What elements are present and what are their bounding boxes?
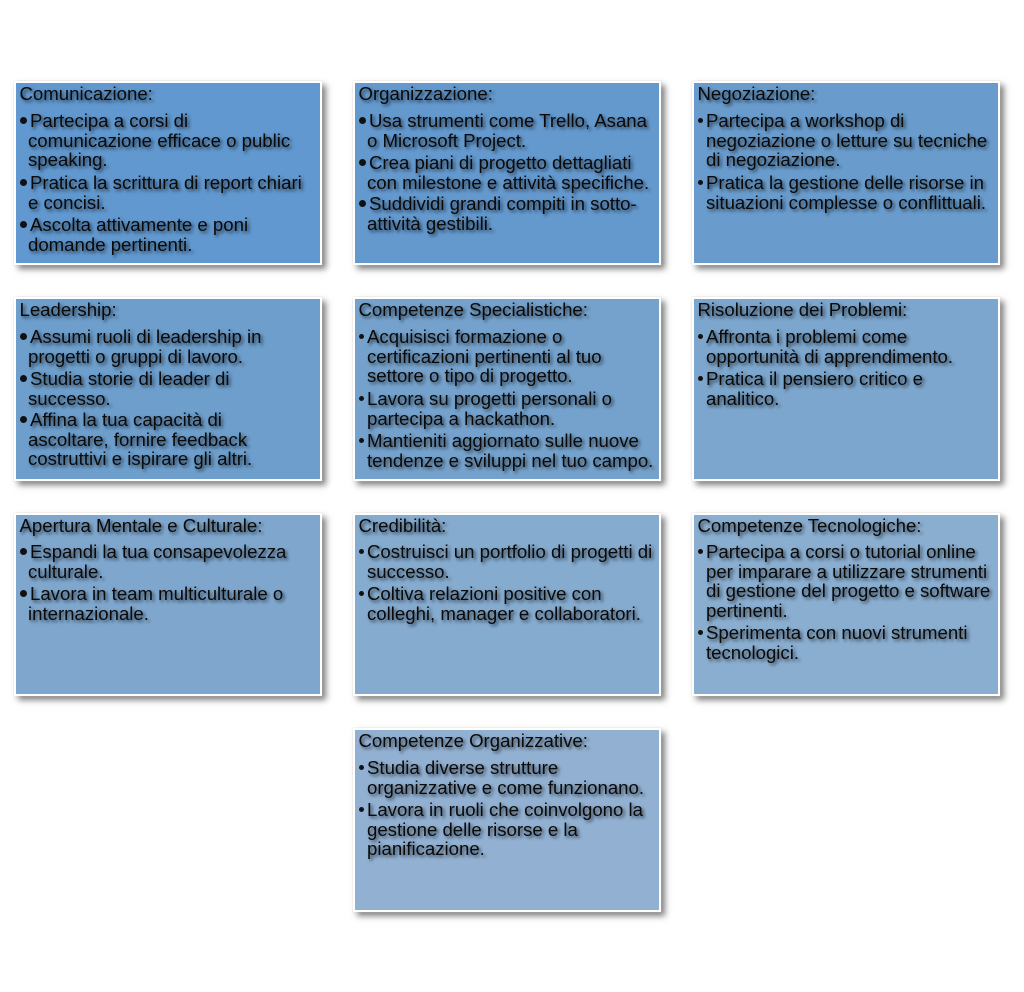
bullet: strutture: Studia diverse strutture <box>367 757 558 778</box>
bullet: opportunità: Affronta i problemi come <box>706 326 907 347</box>
bullet: storie <box>28 369 229 408</box>
bullet: consapevolezza: Espandi la tua consapevolezza <box>30 541 286 562</box>
bullet: ruoli risorse: gestione delle risorse e la <box>367 819 578 840</box>
bullet: strumenti: Usa strumenti come Trello, Asana <box>369 110 647 131</box>
bullet: scrittura <box>28 173 302 212</box>
panel: Competenze Organizzative <box>353 728 661 912</box>
heading: Comunicazione: Comunicazione: <box>20 83 153 104</box>
bullet: ruoli risorse <box>367 800 643 859</box>
bullet: risorse <box>706 173 986 212</box>
bullet: relazioni <box>367 584 641 623</box>
bullet: team <box>28 584 283 623</box>
bullet: workshop <box>706 111 987 170</box>
bullet: relazioni: colleghi, manager e collaboratori. <box>367 603 641 624</box>
bullet: formazione <box>367 327 602 386</box>
bullet: corsi online: per imparare a utilizzare strumenti <box>706 561 987 582</box>
panel: Credibilità <box>353 513 661 696</box>
bullet: corsi online: Partecipa a corsi o tutorial online <box>706 541 976 562</box>
bullet: opportunità: opportunità di apprendimento. <box>706 346 953 367</box>
bullet: risorse: situazioni complesse o conflittuali. <box>706 192 986 213</box>
bullet: sperimenta: Sperimenta con nuovi strumenti <box>706 622 967 643</box>
bullet: consapevolezza: culturale. <box>28 561 103 582</box>
bullet: ruoli risorse: pianificazione. <box>367 838 485 859</box>
bullet: sperimenta <box>706 623 967 662</box>
bullet: progetti personali: Lavora su progetti personali o <box>367 388 612 409</box>
heading: Negoziazione: Negoziazione: <box>698 83 815 104</box>
bullet: pensiero critico: Pratica il pensiero critico e <box>706 368 923 389</box>
bullet: ascoltare: ascoltare, fornire feedback <box>28 429 247 450</box>
bullet: corsi <box>28 111 290 170</box>
bullet: corsi: speaking. <box>28 149 108 170</box>
bullet: ruoli: Assumi ruoli di leadership in <box>30 326 262 347</box>
bullet: corsi online: pertinenti. <box>706 600 788 621</box>
panel: Competenze Tecnologiche <box>692 513 1000 696</box>
bullet: portfolio: successo. <box>367 561 450 582</box>
bullet: ascolto: Ascolta attivamente e poni <box>30 214 248 235</box>
bullet: aggiornato: tendenze e sviluppi nel tuo campo. <box>367 450 653 471</box>
bullet: strutture: organizzative e come funzionano. <box>367 777 644 798</box>
panel: Comunicazione <box>14 81 322 265</box>
bullet: piani <box>367 153 649 192</box>
panel: Negoziazione <box>692 81 1000 265</box>
panel: Organizzazione <box>353 81 661 265</box>
bullet: formazione: certificazioni pertinenti al tuo <box>367 346 602 367</box>
bullet: piani: Crea piani di progetto dettagliati <box>369 152 632 173</box>
bullet: formazione: settore o tipo di progetto. <box>367 365 573 386</box>
bullet: ruoli <box>28 327 262 366</box>
bullet: opportunità <box>706 327 953 366</box>
bullet: ruoli: progetti o gruppi di lavoro. <box>28 346 243 367</box>
bullet: workshop: Partecipa a workshop di <box>706 110 904 131</box>
bullet: pensiero critico: analitico. <box>706 388 779 409</box>
heading: Competenze Organizzative: Competenze Organizzative: <box>358 730 588 751</box>
bullet: ascoltare <box>28 410 252 469</box>
bullet: storie: successo. <box>28 388 111 409</box>
bullet: consapevolezza <box>28 542 286 581</box>
bullet: portfolio <box>367 542 652 581</box>
bullet: portfolio: Costruisci un portfolio di progetti di <box>367 541 652 562</box>
bullet: corsi online: di gestione del progetto e software <box>706 580 990 601</box>
heading: Credibilità: Credibilità: <box>358 515 446 536</box>
bullet: strumenti: o Microsoft Project. <box>367 130 526 151</box>
bullet: corsi online <box>706 542 990 620</box>
bullet: ascolto: domande pertinenti. <box>28 234 192 255</box>
bullet: strumenti <box>367 111 647 150</box>
bullet: progetti personali: partecipa a hackathon. <box>367 408 555 429</box>
bullet: ruoli risorse: Lavora in ruoli che coinvolgono la <box>367 799 643 820</box>
bullet: sperimenta: tecnologici. <box>706 642 799 663</box>
bullet: scrittura: e concisi. <box>28 192 106 213</box>
bullet: piani: con milestone e attività specifiche. <box>367 172 649 193</box>
bullet: strutture <box>367 758 644 797</box>
bullet: ascolto <box>28 215 248 254</box>
bullet: ascoltare: Affina la tua capacità di <box>30 409 222 430</box>
heading: Leadership: Leadership: <box>20 299 117 320</box>
panel: Leadership <box>14 297 322 481</box>
heading: Apertura Mentale e Culturale: Apertura Mentale e Culturale: <box>20 515 262 536</box>
heading: Organizzazione: Organizzazione: <box>358 83 493 104</box>
bullet: formazione: Acquisisci formazione o <box>367 326 562 347</box>
heading: Competenze Specialistiche: Competenze Specialistiche: <box>358 299 588 320</box>
bullet: pensiero critico <box>706 369 923 408</box>
bullet: compiti <box>367 194 637 233</box>
bullet: corsi: Partecipa a corsi di <box>30 110 188 131</box>
bullet: relazioni: Coltiva relazioni positive con <box>367 583 602 604</box>
heading: Competenze Tecnologiche: Competenze Tecnologiche: <box>698 515 921 536</box>
bullet: compiti: Suddividi grandi compiti in sotto- <box>369 193 637 214</box>
panel: Competenze Specialistiche <box>353 297 661 481</box>
bullet: aggiornato <box>367 431 653 470</box>
panel: Risoluzione dei Problemi <box>692 297 1000 481</box>
bullet: compiti: attività gestibili. <box>367 213 493 234</box>
bullet: risorse: Pratica la gestione delle risorse in <box>706 172 984 193</box>
bullet: team: Lavora in team multiculturale o <box>30 583 283 604</box>
bullet: workshop: negoziazione o letture su tecniche <box>706 130 987 151</box>
bullet: team: internazionale. <box>28 603 149 624</box>
bullet: ascoltare: costruttivi e ispirare gli altri. <box>28 448 252 469</box>
panel: Apertura Mentale e Culturale <box>14 513 322 696</box>
bullet: scrittura: Pratica la scrittura di report chiari <box>30 172 302 193</box>
bullet: storie: Studia storie di leader di <box>30 368 229 389</box>
bullet: workshop: di negoziazione. <box>706 149 840 170</box>
bullet: progetti personali <box>367 389 612 428</box>
heading: Risoluzione dei Problemi: Risoluzione dei Problemi: <box>698 299 907 320</box>
bullet: corsi: comunicazione efficace o public <box>28 130 290 151</box>
bullet: aggiornato: Mantieniti aggiornato sulle nuove <box>367 430 639 451</box>
